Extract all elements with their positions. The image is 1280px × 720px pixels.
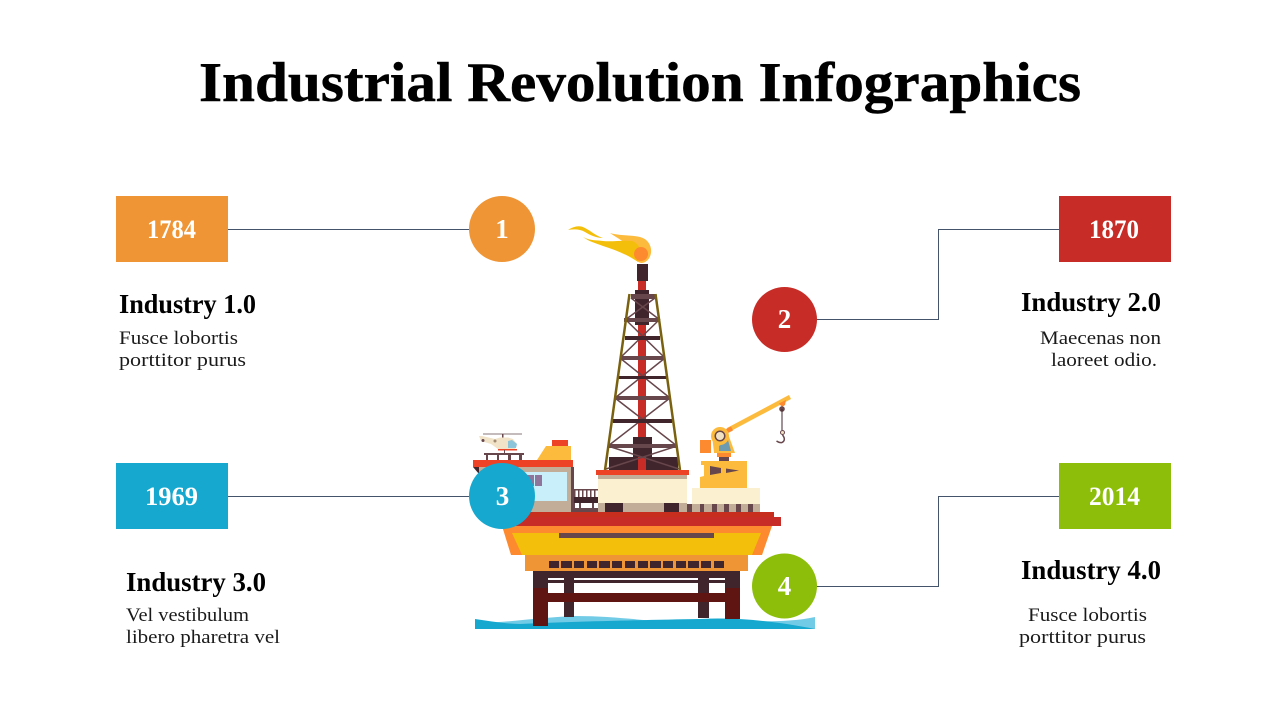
text block: Industry 2.0: Industry 2.0: [1021, 287, 1161, 317]
icon: flame: [568, 226, 651, 263]
icon: helicopter: [479, 434, 522, 453]
connector 2: [817, 230, 1059, 320]
deck: [502, 512, 781, 526]
year box 1784: [116, 196, 228, 262]
number badge 1: 1: [495, 214, 509, 244]
year box 1784: 1784: [147, 215, 196, 244]
number badge 2: 2: [778, 304, 791, 334]
text block: Industry 3.0: libero pharetra vel: [126, 627, 280, 648]
text block: Industry 2.0: Maecenas non: [1040, 328, 1162, 349]
hull: [502, 526, 772, 555]
text block: Industry 1.0: Fusce lobortis: [119, 328, 238, 349]
year box 1969: [116, 463, 228, 529]
crane: [700, 397, 790, 461]
text block: Industry 1.0: [119, 289, 256, 371]
year box 1870: 1870: [1089, 215, 1139, 244]
text block: Industry 2.0: laoreet odio.: [1051, 350, 1157, 371]
text block: Industry 4.0: Fusce lobortis: [1028, 605, 1147, 626]
lower hull band with windows: [525, 555, 748, 571]
text block: Industry 3.0: [126, 567, 280, 648]
connector 4: [817, 496, 1059, 586]
drilling tower: [596, 264, 689, 475]
illustration: offshore oil rig: [473, 226, 815, 629]
number badge 2: [752, 287, 817, 352]
text block: Industry 3.0: Vel vestibulum: [126, 605, 249, 626]
text block: Industry 2.0: [1021, 287, 1162, 371]
year box 2014: [1059, 463, 1171, 529]
text block: Industry 4.0: [1019, 555, 1161, 648]
water: [475, 616, 815, 629]
number badge 3: [469, 463, 535, 529]
rig legs: [533, 571, 740, 626]
left cabin: [473, 440, 574, 512]
text block: Industry 4.0: porttitor purus: [1019, 627, 1146, 648]
connector 1: [228, 228, 469, 230]
number badge 1: [469, 196, 535, 262]
right building: [687, 461, 760, 512]
year box 2014: 2014: [1089, 482, 1140, 511]
text block: Industry 4.0: Industry 4.0: [1021, 555, 1161, 585]
number badge 4: 4: [778, 571, 791, 601]
centre building: [598, 475, 687, 512]
text block: Industry 1.0: porttitor purus: [119, 350, 246, 371]
text block: Industry 1.0: Industry 1.0: [119, 289, 256, 319]
year box 1870: [1059, 196, 1171, 262]
year box 1969: 1969: [145, 482, 198, 511]
number badge 3: 3: [496, 481, 509, 511]
number badge 4: [752, 554, 817, 618]
title: Industrial Revolution Infographics: [199, 52, 1081, 114]
text block: Industry 3.0: Industry 3.0: [126, 567, 266, 597]
connector 3: [228, 496, 469, 498]
railing walkway: [574, 489, 598, 512]
